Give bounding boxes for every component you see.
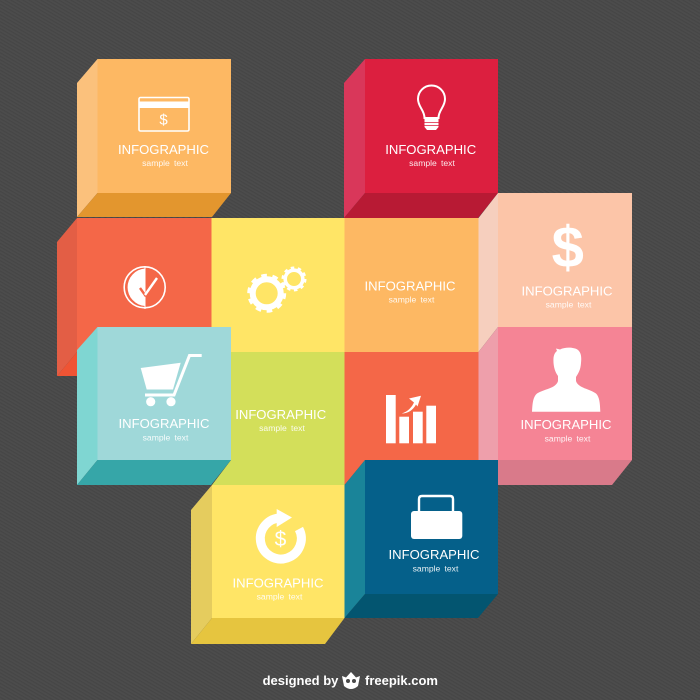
icon: briefcase — [411, 496, 462, 539]
panel: orange card cube — [77, 59, 231, 217]
text block: sample text — [143, 432, 189, 442]
panel: yellow gears cell — [212, 218, 345, 352]
heading: INFOGRAPHIC — [522, 284, 612, 298]
icon: clock with check mark — [124, 266, 165, 309]
panel: dark blue bag cube — [344, 460, 498, 618]
text block: sample text — [389, 294, 435, 304]
panel: peach dollar cube — [478, 193, 632, 352]
panel: lime text cell — [212, 352, 344, 485]
icon: light bulb — [418, 86, 445, 130]
panel: pink person cube — [478, 327, 632, 485]
icon: dollar bill card: $ — [159, 112, 168, 128]
text block: sample text — [546, 300, 592, 310]
text block: sample text — [259, 423, 305, 433]
credit text right: freepik.com — [365, 673, 438, 688]
text block: sample text — [409, 158, 455, 168]
panel: red bulb cube — [344, 59, 498, 218]
text block: sample text — [413, 564, 459, 574]
heading: INFOGRAPHIC — [365, 278, 455, 294]
icon: person silhouette — [532, 348, 600, 412]
icon: circular arrow with dollar: $ — [275, 528, 287, 551]
heading: INFOGRAPHIC — [119, 416, 209, 431]
panel: tomato center-left cell with clock icon — [57, 218, 212, 376]
heading: INFOGRAPHIC — [385, 142, 476, 157]
icon: dollar bill card — [139, 98, 189, 131]
heading: INFOGRAPHIC — [521, 417, 611, 432]
footer credit — [263, 672, 438, 689]
text block: sample text — [142, 158, 188, 168]
credit text left: designed by — [263, 673, 339, 688]
icon: dollar sign: $ — [552, 215, 584, 280]
icon: shopping cart — [141, 356, 202, 406]
panel: yellow refresh cube — [191, 485, 344, 644]
icon: freepik logo — [342, 672, 360, 689]
heading: INFOGRAPHIC — [235, 407, 326, 422]
panel: teal cart cube — [77, 327, 231, 485]
text block: sample text — [545, 434, 591, 444]
panel: orange text cell — [344, 218, 478, 352]
text block: sample text — [257, 592, 303, 602]
icon: gears — [249, 268, 305, 311]
heading: INFOGRAPHIC — [389, 547, 479, 562]
heading: INFOGRAPHIC — [233, 576, 323, 590]
panel: tomato chart cell — [344, 352, 478, 485]
icon: circular arrow with dollar — [260, 509, 301, 559]
heading: INFOGRAPHIC — [118, 142, 209, 157]
icon: bar chart with arrow — [386, 395, 436, 443]
